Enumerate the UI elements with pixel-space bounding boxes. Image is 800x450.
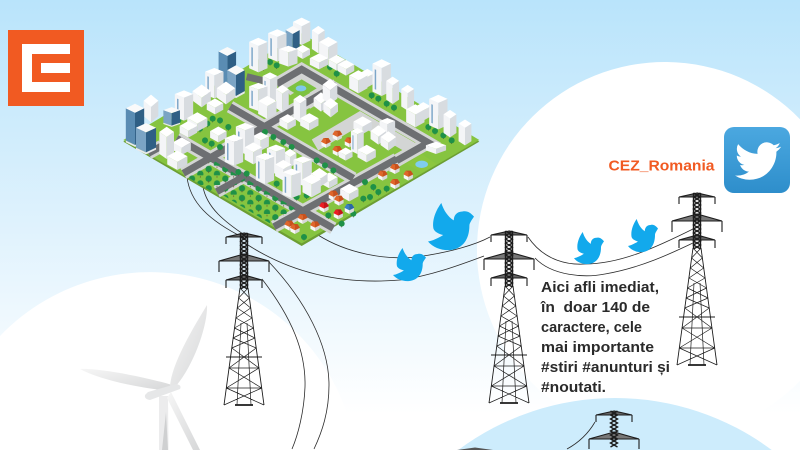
bird 1 xyxy=(428,203,474,250)
power lines xyxy=(187,177,695,449)
description text: în doar 140 de xyxy=(540,299,650,316)
left white circle xyxy=(0,272,356,450)
description text: caractere, cele xyxy=(541,319,642,336)
bird 2 xyxy=(393,248,426,281)
city roads xyxy=(148,69,428,228)
orchards xyxy=(187,160,295,223)
bird 4 xyxy=(628,219,658,252)
right white circle xyxy=(477,62,800,438)
tower 5 partial xyxy=(457,448,493,450)
twitter icon xyxy=(724,127,790,193)
city: isometric map xyxy=(123,18,479,246)
description text: #noutati. xyxy=(541,379,606,396)
tower 4 partial xyxy=(589,411,639,449)
park with fountain xyxy=(287,79,317,97)
buildings xyxy=(126,18,471,234)
pond xyxy=(407,154,437,173)
logo: CEZ xyxy=(8,30,84,106)
city ground xyxy=(123,33,479,246)
description text xyxy=(540,279,670,396)
description text: mai importante xyxy=(541,339,654,356)
tower 3 xyxy=(672,193,722,365)
tower 1 xyxy=(219,233,269,405)
bird 3 xyxy=(574,232,604,264)
description text: Aici afli imediat, xyxy=(541,279,659,296)
twitter handle: CEZ_Romania xyxy=(608,158,715,174)
trees xyxy=(169,59,455,241)
description text: #stiri #anunturi și xyxy=(541,359,670,376)
tower 2 xyxy=(484,231,534,403)
bottom blue circle xyxy=(458,398,772,450)
wind turbine xyxy=(80,305,207,450)
